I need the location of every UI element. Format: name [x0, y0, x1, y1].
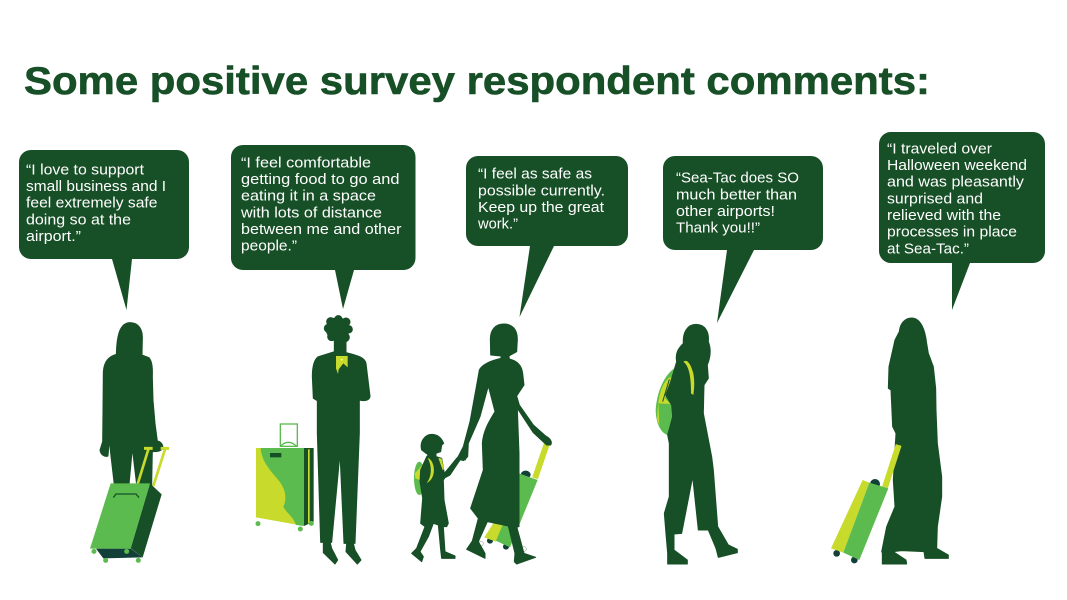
speech bubble 2: getting food to go and [241, 171, 400, 188]
speech bubble 1 [19, 150, 189, 310]
traveler 2 silhouette [312, 316, 370, 564]
suitcase [90, 483, 162, 563]
speech bubble 1: doing so at the [26, 211, 131, 228]
speech bubble 3: possible currently. [478, 182, 605, 199]
speech bubble 4: much better than [676, 186, 797, 203]
speech bubble 5: at Sea-Tac.” [887, 240, 969, 257]
traveler 5 with suitcase [831, 318, 948, 564]
speech bubble 1: feel extremely safe [26, 195, 158, 212]
silhouette: woman with long hair [100, 323, 163, 485]
suitcase [831, 445, 899, 563]
title: Some positive survey respondent comments: [24, 60, 930, 103]
silhouette: figure in long robe [882, 318, 948, 564]
suitcase handle [138, 448, 169, 486]
speech bubble 5: and was pleasantly [887, 174, 1025, 191]
speech bubble 5: Halloween weekend [887, 157, 1027, 174]
speech bubble 2: people.” [241, 238, 297, 255]
speech bubble 1: small business and I [26, 178, 166, 195]
traveler 3 and child [412, 324, 737, 564]
speech bubble 2: “I feel comfortable [241, 154, 371, 171]
woman silhouette [457, 324, 551, 564]
speech bubble 1: airport.” [26, 228, 81, 245]
speech bubble 2: eating it in a space [241, 188, 376, 205]
speech bubble 2 [231, 145, 416, 309]
speech bubble 3: “I feel as safe as [478, 166, 592, 183]
backpack strap [663, 361, 694, 402]
speech bubble 4: other airports! [676, 203, 775, 220]
speech bubble 3 [466, 156, 628, 317]
speech bubble 2: between me and other [241, 221, 402, 238]
child backpack straps [427, 458, 444, 483]
speech bubble 2: with lots of distance [240, 204, 382, 221]
speech bubble 5: surprised and [887, 190, 983, 207]
child backpack [414, 462, 425, 495]
phone [336, 356, 348, 374]
traveler 1 with tilted suitcase [90, 316, 370, 564]
speech bubble 5 [879, 132, 1045, 310]
rolling suitcase [479, 443, 547, 551]
speech bubble 5: “I traveled over [887, 140, 992, 157]
speech bubble 4: Thank you!!” [676, 220, 760, 237]
speech bubble 3: Keep up the great [478, 199, 605, 216]
speech bubble 4 [663, 156, 823, 323]
speech bubble 4: “Sea-Tac does SO [676, 170, 799, 187]
suitcase 2 [255, 424, 314, 531]
speech bubble 5: relieved with the [887, 207, 1001, 224]
speech bubble 5: processes in place [887, 224, 1017, 241]
speech bubble 3: work.” [477, 216, 518, 233]
speech bubble 1: “I love to support [26, 161, 145, 178]
traveler 4 backpack [656, 367, 678, 435]
child silhouette [412, 434, 466, 562]
traveler 4 silhouette [664, 324, 737, 564]
